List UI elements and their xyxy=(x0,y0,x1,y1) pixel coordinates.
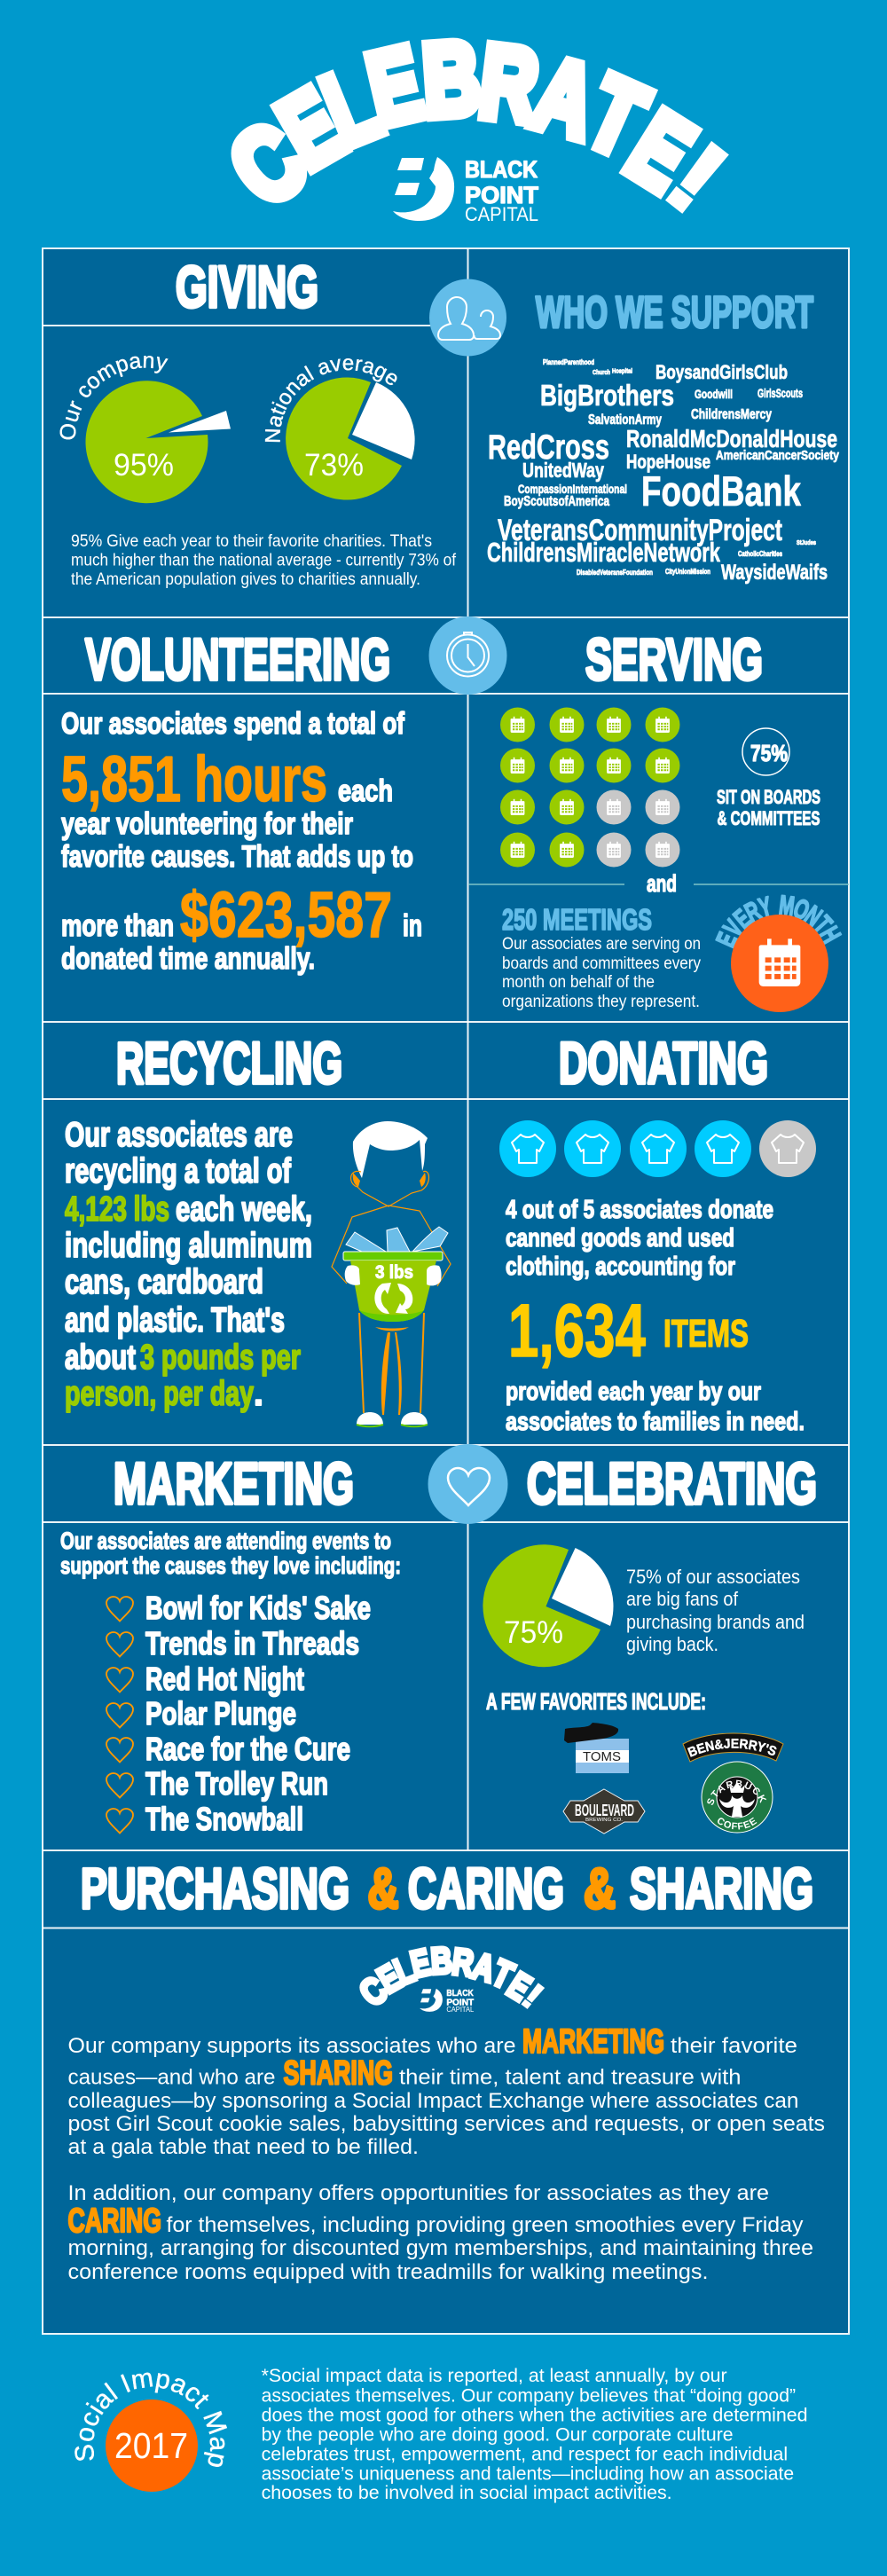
panel: purchasing caring sharing xyxy=(67,1857,825,2284)
giving description: the American population gives to charities annually. xyxy=(71,570,420,589)
small celebrate logo: C xyxy=(352,1969,396,2014)
small celebrate logo: R xyxy=(450,1940,476,1984)
logo wordmark: BLACK xyxy=(465,156,538,183)
body paragraph two: conference rooms equipped with treadmills for walking meetings. xyxy=(67,2260,709,2284)
event list with heart bullets: Race for the Cure xyxy=(145,1731,350,1767)
favorites label: A FEW FAVORITES INCLUDE: xyxy=(486,1688,706,1715)
title lettering: T xyxy=(571,54,662,178)
body paragraph one: Our company supports its associates who are xyxy=(67,2034,516,2058)
recycling statistics text xyxy=(65,1116,312,1413)
volunteering statistics text xyxy=(61,707,422,976)
word cloud: CompassionInternational xyxy=(518,482,627,496)
footnote xyxy=(262,2365,808,2503)
footnote: chooses to be involved in social impact activities. xyxy=(262,2482,672,2503)
logo: boulevard: BREWING CO. xyxy=(585,1818,624,1823)
volunteering statistics text: year volunteering for their xyxy=(61,807,353,841)
panel: donating xyxy=(499,1030,816,1436)
pie chart: our company 95% xyxy=(60,356,231,504)
word cloud: BoysandGirlsClub xyxy=(655,361,788,383)
panel: recycling xyxy=(65,1030,451,1426)
marketing intro text xyxy=(60,1528,401,1579)
badge: social impact map 2017: 2017 xyxy=(114,2425,188,2466)
every month badge: N xyxy=(799,899,828,932)
body paragraph two: CARING xyxy=(67,2203,161,2240)
title lettering: L xyxy=(308,44,395,169)
volunteering statistics text: $623,587 xyxy=(180,880,392,951)
celebrating description: 75% of our associates xyxy=(626,1566,800,1588)
marketing intro text: Our associates are attending events to xyxy=(60,1528,391,1554)
recycling statistics text: Our associates are xyxy=(65,1116,293,1154)
pie chart: national average 73%: 73% xyxy=(304,448,364,483)
recycling statistics text: person, per day xyxy=(65,1375,254,1413)
small celebrate logo: E xyxy=(371,1957,408,2001)
heading: purchasing and caring and sharing xyxy=(81,1857,813,1920)
every month badge: R xyxy=(740,895,765,929)
recycling statistics text: 3 pounds per xyxy=(140,1339,301,1377)
logo: starbucks xyxy=(701,1762,773,1833)
body paragraph one: causes—and who are xyxy=(67,2066,275,2090)
logo: toms: TOMS xyxy=(583,1749,621,1764)
volunteering statistics text: Our associates spend a total of xyxy=(61,707,405,741)
word cloud: RedCross xyxy=(488,428,609,467)
every month badge: E xyxy=(727,903,757,935)
word cloud: Goodwill xyxy=(695,387,733,401)
small celebrate logo: A xyxy=(468,1944,499,1990)
pie chart: our company 95%: Our company xyxy=(60,356,169,440)
giving description: 95% Give each year to their favorite charities. That's xyxy=(71,532,432,551)
word cloud: CatholicCharities xyxy=(738,550,782,558)
panel: giving xyxy=(60,254,457,589)
title lettering: A xyxy=(522,35,607,161)
logo wordmark xyxy=(465,156,538,225)
pie chart: 75%: 75% xyxy=(504,1615,563,1650)
volunteering statistics text: 5,851 hours xyxy=(61,744,327,815)
75% badge xyxy=(742,728,789,775)
small celebrate logo: BLACK xyxy=(446,1989,475,1999)
word cloud: WaysideWaifs xyxy=(721,561,828,585)
meetings description: month on behalf of the xyxy=(502,973,655,992)
panel: celebrating xyxy=(483,1450,817,1834)
word cloud: UnitedWay xyxy=(522,459,604,482)
heading: marketing: MARKETING xyxy=(114,1450,354,1516)
title lettering xyxy=(209,20,748,235)
logo: starbucks: COFFEE xyxy=(718,1817,757,1829)
every month badge: O xyxy=(789,892,814,927)
footnote: associate’s uniqueness and talents—including how an associate xyxy=(262,2463,794,2485)
title: Celebrate with Black Point Capital logo xyxy=(209,20,748,235)
event list with heart bullets: The Snowball xyxy=(145,1801,303,1837)
donating statistics text: clothing, accounting for xyxy=(506,1253,735,1281)
word cloud: GirlsScouts xyxy=(757,386,803,400)
word cloud: SalvationArmy xyxy=(588,412,662,428)
meetings description: organizations they represent. xyxy=(502,993,700,1011)
donating statistics text: canned goods and used xyxy=(506,1224,734,1253)
body paragraph one: their time, talent and treasure with xyxy=(399,2066,742,2090)
event list with heart bullets: Polar Plunge xyxy=(145,1695,296,1732)
title lettering: E xyxy=(261,67,361,191)
event list with heart bullets: Trends in Threads xyxy=(145,1625,359,1661)
word cloud: FoodBank xyxy=(641,467,802,514)
panel: marketing xyxy=(60,1450,401,1837)
logo: boulevard: BOULEVARD xyxy=(575,1802,634,1819)
footnote: associates themselves. Our company believes that “doing good” xyxy=(262,2384,796,2406)
heading: giving: GIVING xyxy=(176,254,318,319)
icon: heart xyxy=(428,1444,507,1524)
donating statistics text xyxy=(506,1196,805,1436)
illustration: person holding recycling bucket xyxy=(332,1121,451,1426)
small celebrate logo: B xyxy=(429,1939,453,1982)
footnote: celebrates trust, empowerment, and respect for each individual xyxy=(262,2444,788,2465)
recycling statistics text: about xyxy=(65,1339,136,1377)
title lettering: E xyxy=(358,26,432,148)
body paragraph one: post Girl Scout cookie sales, babysitting services and requests, or open seats xyxy=(67,2112,825,2136)
recycling statistics text: each week, xyxy=(176,1190,312,1229)
body paragraph one: at a gala table that need to be filled. xyxy=(67,2135,419,2159)
word cloud: CityUnionMission xyxy=(665,568,710,576)
celebrating description: are big fans of xyxy=(626,1588,739,1610)
body paragraph one: colleagues—by sponsoring a Social Impact Exchange where associates can xyxy=(67,2089,798,2113)
main panel xyxy=(43,248,849,1854)
small celebrate logo: T xyxy=(486,1952,520,1997)
recycling statistics text: and plastic. That's xyxy=(65,1301,285,1339)
heading: donating: DONATING xyxy=(559,1030,768,1096)
small celebrate logo xyxy=(352,1939,552,2017)
meetings description xyxy=(502,935,701,1011)
illustration: person holding recycling bucket: 3 lbs xyxy=(375,1262,413,1283)
pie chart: national average 73%: National average xyxy=(264,358,397,442)
small celebrate logo: L xyxy=(388,1948,420,1993)
recycle arrows xyxy=(374,1283,412,1314)
meetings description: Our associates are serving on xyxy=(502,935,701,954)
pie chart: 75% xyxy=(483,1544,613,1667)
volunteering statistics text: in xyxy=(403,909,422,943)
panel: serving xyxy=(500,626,847,1012)
small celebrate logo: E xyxy=(406,1941,434,1985)
body paragraph two xyxy=(67,2181,813,2284)
body paragraph two: In addition, our company offers opportunities for associates as they are xyxy=(67,2181,769,2205)
small celebrate logo: CAPITAL xyxy=(446,2006,475,2014)
every month badge: Y xyxy=(756,891,775,923)
giving description xyxy=(71,532,457,589)
volunteering statistics text: more than xyxy=(61,909,174,943)
calendar icon grid: 12 of 16 in green xyxy=(500,708,679,868)
footnote: *Social impact data is reported, at least annually, by our xyxy=(262,2365,727,2386)
donating statistics text: 4 out of 5 associates donate xyxy=(506,1196,773,1224)
donating statistics text: associates to families in need. xyxy=(506,1408,805,1436)
event list with heart bullets: Bowl for Kids' Sake xyxy=(145,1590,371,1626)
small celebrate logo: POINT xyxy=(446,1999,474,2008)
logo: toms xyxy=(564,1723,629,1773)
word cloud: ChildrensMiracleNetwork xyxy=(487,537,721,568)
250 meetings heading: 250 MEETINGS xyxy=(502,903,652,936)
recycling statistics text: . xyxy=(254,1375,263,1413)
every month badge xyxy=(710,889,847,1012)
recycling statistics text: cans, cardboard xyxy=(65,1263,263,1301)
title lettering: R xyxy=(475,23,544,144)
every month badge: M xyxy=(777,889,797,922)
logo: ben and jerrys: BEN&JERRY'S xyxy=(687,1739,777,1757)
heading: serving: SERVING xyxy=(585,626,763,692)
title lettering: C xyxy=(209,101,327,228)
every month badge: V xyxy=(717,914,750,943)
heading: purchasing and caring and sharing: SHARING xyxy=(630,1857,813,1920)
panel frame lines xyxy=(43,248,849,2334)
title lettering: B xyxy=(420,20,483,138)
volunteering statistics text: favorite causes. That adds up to xyxy=(61,840,413,874)
celebrating description xyxy=(626,1566,805,1655)
giving description: much higher than the national average - currently 73% of xyxy=(71,552,457,569)
logo: starbucks: STARBUCKS xyxy=(707,1779,766,1805)
body paragraph one: SHARING xyxy=(284,2055,393,2093)
heading: recycling: RECYCLING xyxy=(116,1030,342,1096)
event list with heart bullets: The Trolley Run xyxy=(145,1765,328,1802)
word cloud: Hospital xyxy=(612,369,632,375)
panel: who we support xyxy=(487,287,840,585)
logo wordmark: POINT xyxy=(465,182,538,208)
panel: volunteering xyxy=(61,626,422,976)
event list with heart bullets: Red Hot Night xyxy=(145,1661,304,1697)
word cloud: StJudes xyxy=(797,540,816,546)
logo wordmark: CAPITAL xyxy=(465,203,538,225)
celebrating description: purchasing brands and xyxy=(626,1611,805,1633)
small celebrate logo: E xyxy=(500,1965,538,2009)
body paragraph two: morning, arranging for discounted gym memberships, and maintaining three xyxy=(67,2236,813,2260)
every month badge: E xyxy=(710,928,743,952)
sit on boards label xyxy=(717,786,820,829)
title lettering: ! xyxy=(646,121,748,235)
word cloud: ChildrensMercy xyxy=(691,407,772,422)
and divider label: and xyxy=(647,870,677,897)
word cloud: VeteransCommunityProject xyxy=(498,514,782,547)
heading: purchasing and caring and sharing: & xyxy=(367,1857,399,1920)
marketing intro text: support the causes they love including: xyxy=(60,1552,401,1579)
small celebrate logo: ! xyxy=(514,1975,552,2017)
title lettering: E xyxy=(609,90,711,213)
word cloud: PlannedParenthood xyxy=(543,358,594,366)
volunteering statistics text: donated time annually. xyxy=(61,942,315,976)
body paragraph one: MARKETING xyxy=(522,2023,664,2061)
word cloud: AmericanCancerSociety xyxy=(716,448,840,463)
word cloud: HopeHouse xyxy=(626,451,710,473)
volunteering statistics text: each xyxy=(338,774,393,808)
sit on boards label: & COMMITTEES xyxy=(717,807,820,829)
body paragraph one xyxy=(67,2023,825,2159)
word cloud: BoyScoutsofAmerica xyxy=(504,494,609,509)
body paragraph two: for themselves, including providing green smoothies every Friday xyxy=(167,2213,804,2237)
recycling statistics text: 4,123 lbs xyxy=(65,1190,169,1229)
heading: purchasing and caring and sharing: & xyxy=(584,1857,616,1920)
icon: people xyxy=(429,279,506,357)
donating statistics text: ITEMS xyxy=(663,1312,749,1355)
footnote: by the people who are doing good. Our corporate culture xyxy=(262,2424,734,2446)
pie chart: our company 95%: 95% xyxy=(114,448,174,483)
pie chart: national average 73% xyxy=(264,358,415,500)
donating statistics text: provided each year by our xyxy=(506,1378,761,1406)
shirt icons: 4 of 5 xyxy=(499,1120,816,1177)
icon: stopwatch xyxy=(429,617,507,695)
every month badge: H xyxy=(813,922,847,948)
75% badge: 75% xyxy=(750,740,788,766)
celebrating description: giving back. xyxy=(626,1633,718,1655)
sit on boards label: SIT ON BOARDS xyxy=(717,786,820,808)
event list with heart bullets xyxy=(106,1590,371,1837)
footnote: does the most good for others when the activities are determined xyxy=(262,2404,808,2425)
heading: purchasing and caring and sharing: CARING xyxy=(408,1857,564,1920)
logo: boulevard xyxy=(563,1789,645,1834)
recycling statistics text: including aluminum xyxy=(65,1227,312,1265)
every month badge: T xyxy=(807,910,838,939)
meetings description: boards and committees every xyxy=(502,954,701,973)
word cloud xyxy=(487,358,840,585)
donating statistics text: 1,634 xyxy=(508,1289,646,1372)
word cloud: BigBrothers xyxy=(540,379,674,412)
heading: volunteering: VOLUNTEERING xyxy=(85,626,390,692)
badge: social impact map 2017: Social Impact Map xyxy=(75,2372,227,2467)
body paragraph one: their favorite xyxy=(671,2034,797,2058)
word cloud: DisabledVeteransFoundation xyxy=(577,569,653,577)
word cloud: Church xyxy=(593,370,610,376)
logo mark xyxy=(393,157,454,221)
heading: purchasing and caring and sharing: PURCHASING xyxy=(81,1857,349,1920)
recycling statistics text: recycling a total of xyxy=(65,1152,292,1190)
